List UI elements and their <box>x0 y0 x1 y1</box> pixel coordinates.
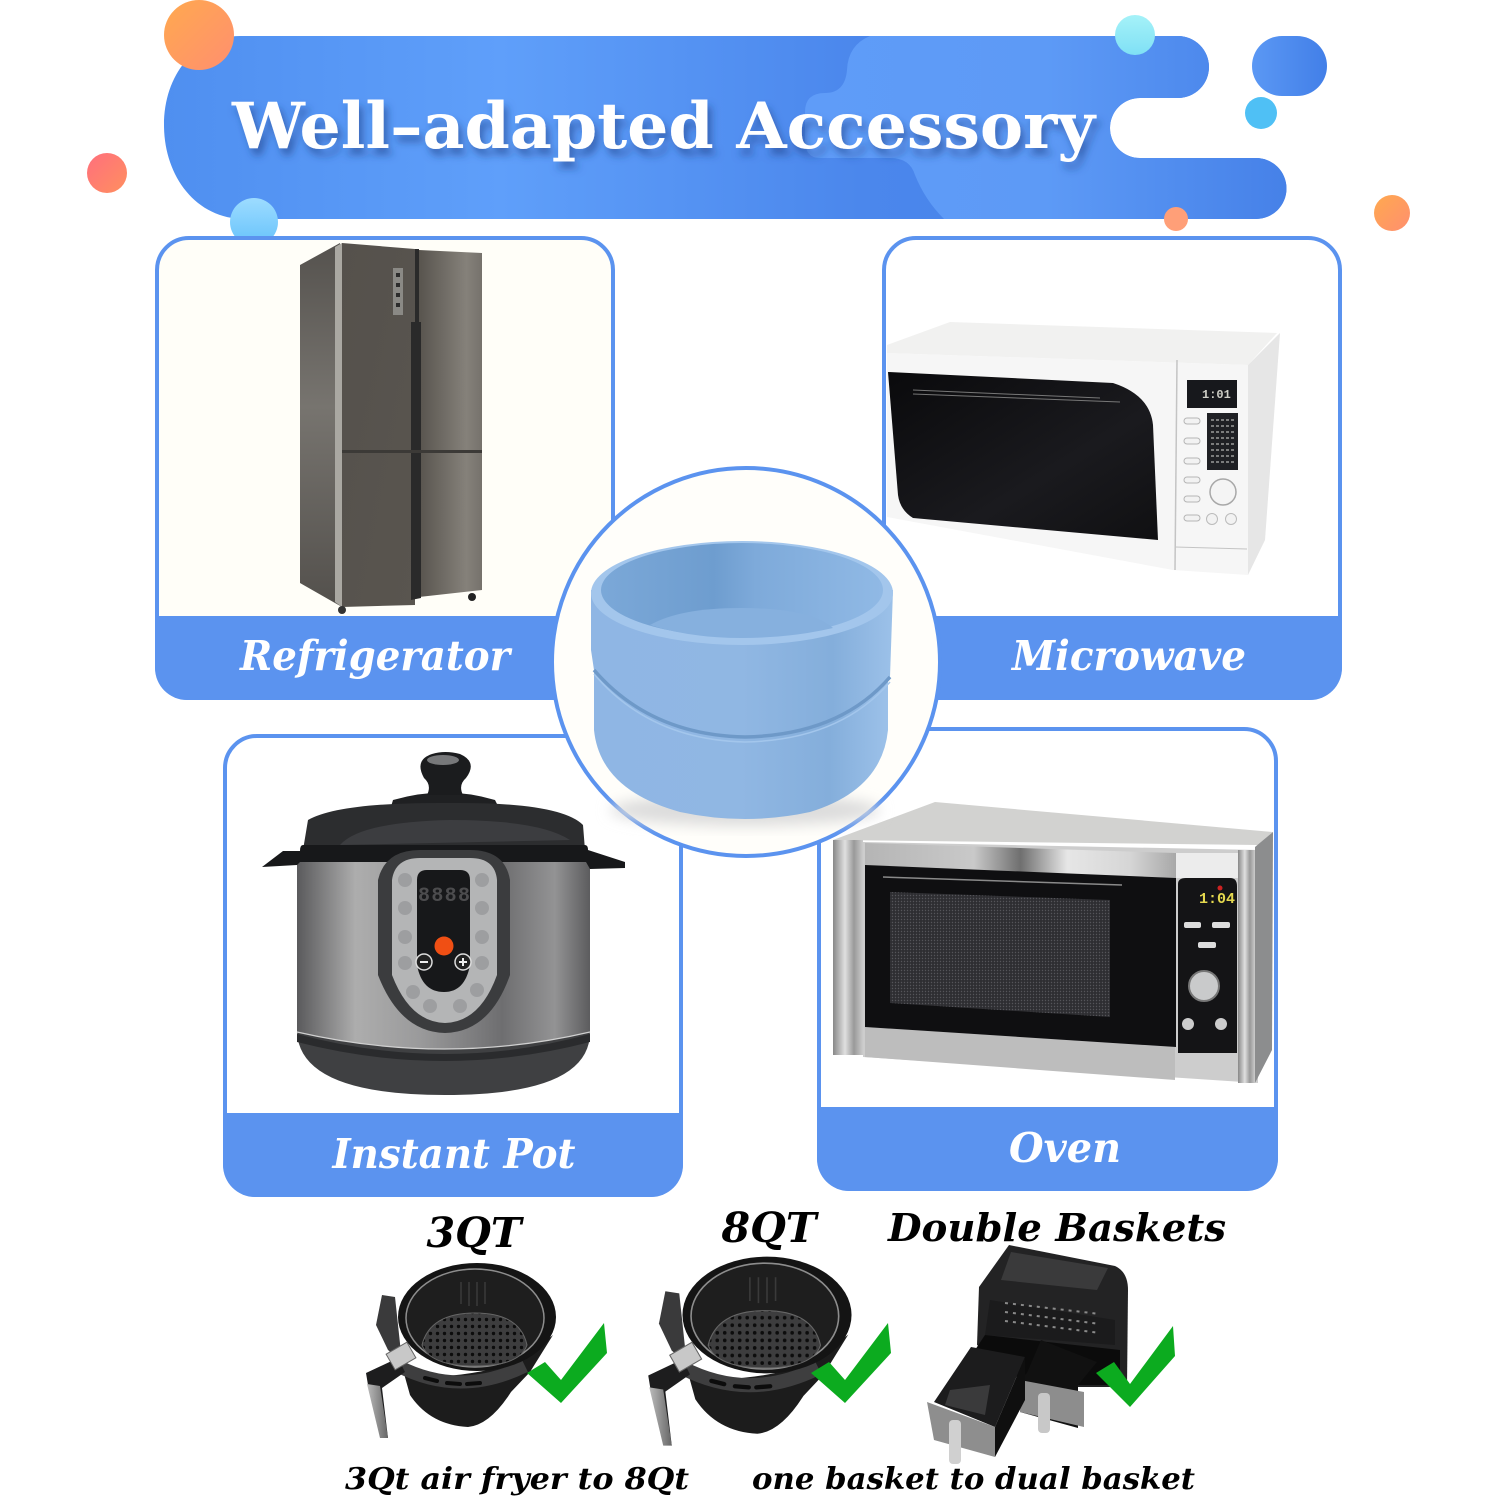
label: Instant Pot: Instant Pot <box>332 1130 576 1178</box>
icon: microwave <box>887 322 1280 575</box>
icon: instant pot: 8888 <box>418 885 470 908</box>
title: Well–adapted Accessory <box>231 89 1097 164</box>
icon: 3QT check <box>527 1323 607 1403</box>
label: Oven: Oven <box>1009 1124 1121 1172</box>
panel: microwave <box>882 238 1342 700</box>
label: Refrigerator: Refrigerator <box>239 632 513 680</box>
icon: oven: 1:04 <box>1199 891 1235 908</box>
panel: instant pot <box>223 736 683 1197</box>
icon: double basket air fryer <box>927 1245 1128 1464</box>
caption: one basket to dual basket: one basket to dual basket <box>752 1462 1195 1497</box>
center circle: silicone bowls <box>552 468 940 856</box>
icon: 8QT check <box>811 1323 891 1403</box>
heading: 8QT: 8QT <box>720 1204 819 1252</box>
icon: microwave: 1:01 <box>1202 388 1231 402</box>
icon: double basket check <box>1096 1326 1175 1407</box>
icon: 8QT basket <box>648 1257 852 1446</box>
panel: refrigerator <box>155 238 615 700</box>
icon: refrigerator <box>300 243 482 614</box>
icon: instant pot <box>262 752 625 1095</box>
title banner <box>164 36 1286 219</box>
icon: 3QT basket <box>366 1263 556 1438</box>
heading: Double Baskets: Double Baskets <box>887 1205 1226 1250</box>
caption: 3Qt air fryer to 8Qt: 3Qt air fryer to 8Qt <box>345 1462 689 1497</box>
section: basket sizes <box>345 1204 1226 1497</box>
icon: oven <box>833 802 1273 1083</box>
label: Microwave: Microwave <box>1010 632 1246 680</box>
decorative bubbles <box>87 0 1410 246</box>
heading: 3QT: 3QT <box>426 1209 524 1257</box>
panel: oven <box>817 729 1278 1191</box>
